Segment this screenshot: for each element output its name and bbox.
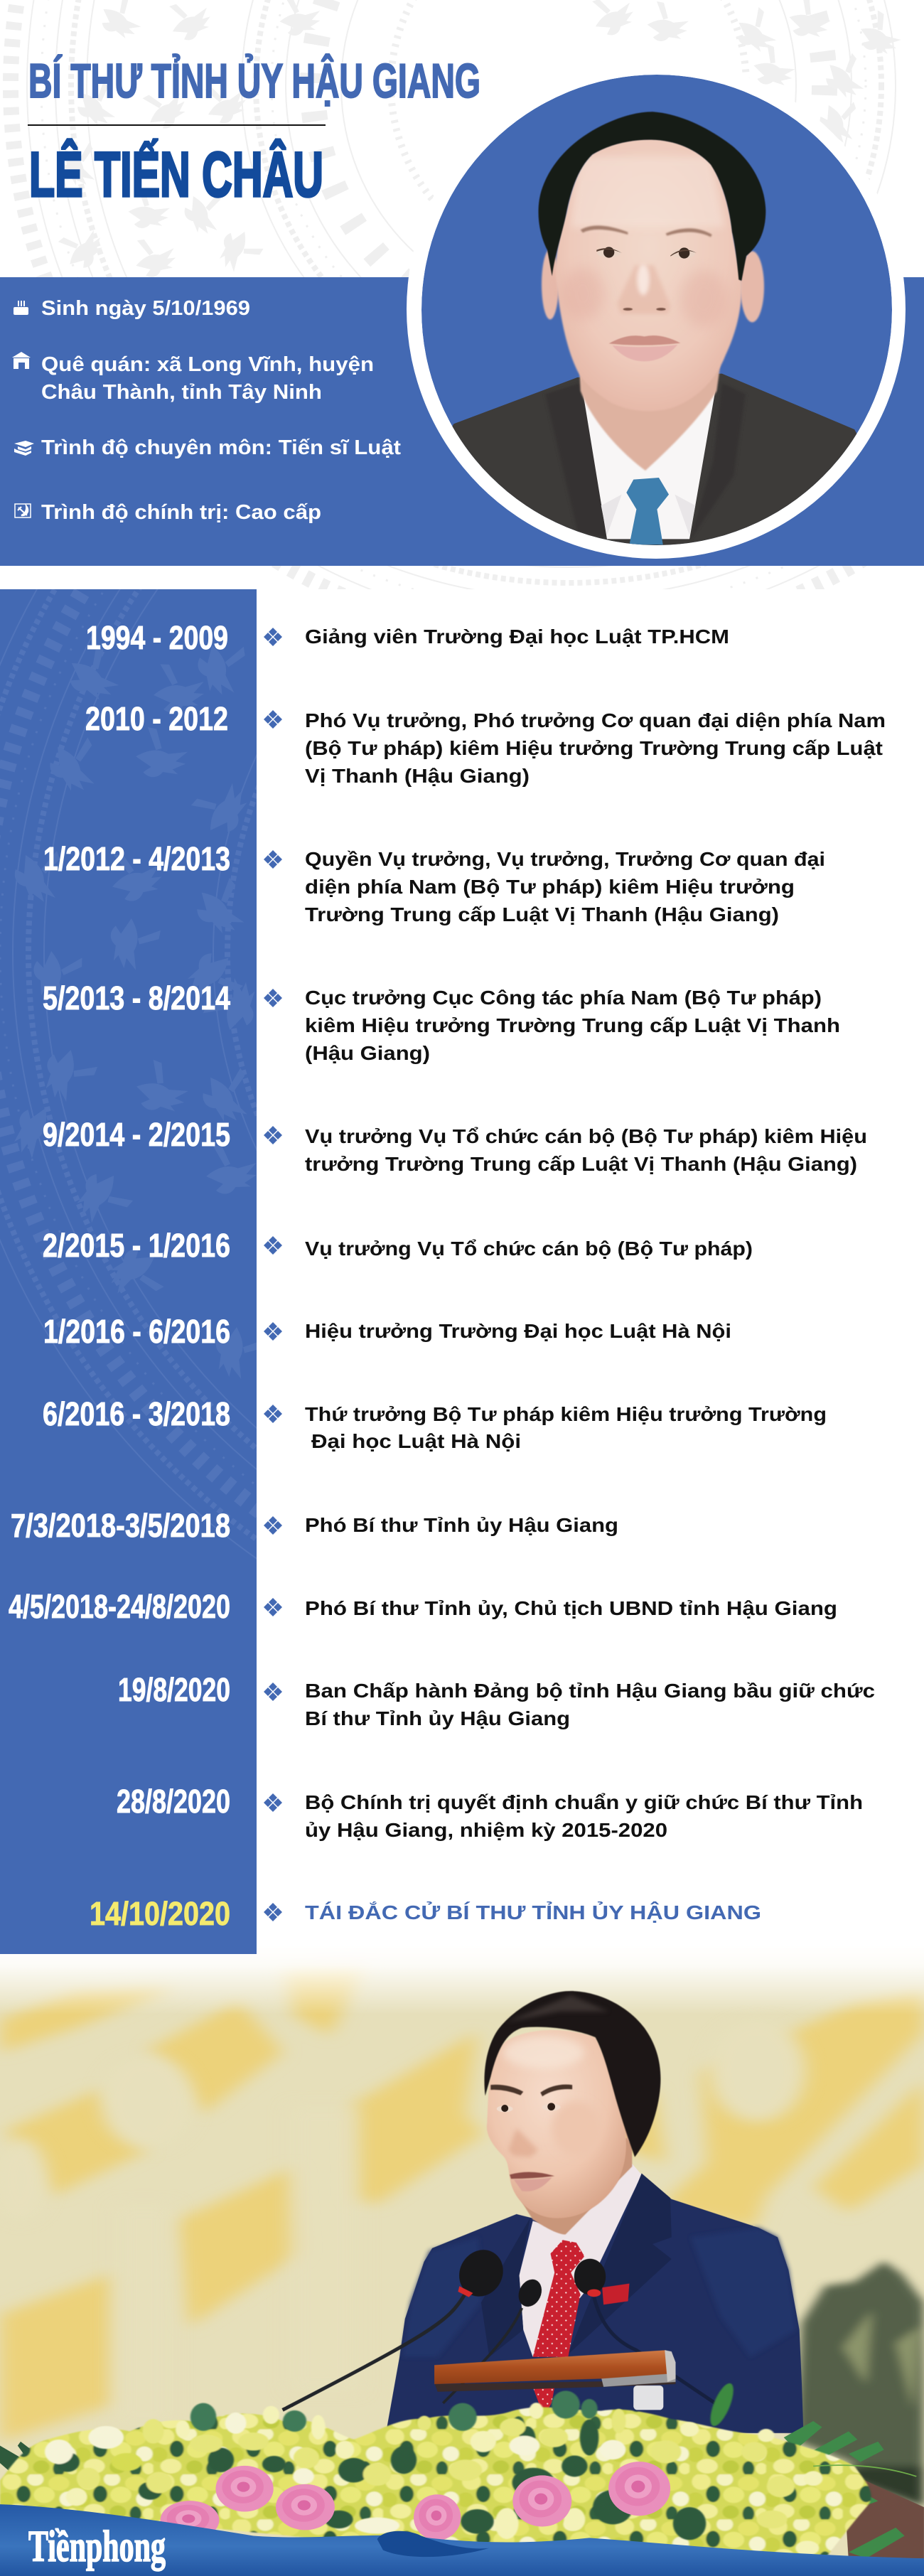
icon: house bbox=[12, 352, 31, 369]
timeline row 6 bbox=[43, 1227, 753, 1264]
bullet bbox=[264, 628, 282, 646]
description: Phó Bí thư Tỉnh ủy Hậu Giang bbox=[305, 1514, 618, 1536]
date: 2010 - 2012 bbox=[85, 700, 228, 737]
date: 1994 - 2009 bbox=[86, 619, 228, 656]
ear bbox=[625, 2128, 630, 2142]
description: Vụ trưởng Vụ Tổ chức cán bộ (Bộ Tư pháp) bbox=[305, 1238, 753, 1260]
leaves bbox=[0, 2442, 47, 2479]
suit bbox=[386, 2173, 803, 2433]
date: 2/2015 - 1/2016 bbox=[43, 1227, 230, 1264]
timeline row 3 bbox=[43, 840, 825, 925]
nose bbox=[508, 2128, 538, 2157]
description: Bí thư Tỉnh ủy Hậu Giang bbox=[305, 1707, 570, 1729]
portrait: photo in blue circle bbox=[421, 75, 892, 545]
description: Vị Thanh (Hậu Giang) bbox=[305, 765, 530, 787]
white fade at top of photo bbox=[0, 1944, 924, 2015]
date: 5/2013 - 8/2014 bbox=[43, 980, 230, 1016]
bullet bbox=[264, 850, 282, 869]
description bbox=[305, 709, 886, 787]
timeline row 12 bbox=[117, 1783, 863, 1841]
description bbox=[305, 1125, 867, 1175]
timeline row 2 bbox=[85, 700, 886, 787]
name heading: LÊ TIẾN CHÂU bbox=[29, 139, 323, 210]
description bbox=[305, 987, 840, 1064]
eyes bbox=[497, 2105, 513, 2112]
icon: hammer and sickle bbox=[15, 504, 31, 517]
bullet bbox=[264, 1516, 282, 1535]
date: 28/8/2020 bbox=[117, 1783, 230, 1820]
flower leaves dark bbox=[190, 2403, 216, 2431]
face bbox=[556, 139, 741, 411]
info: professional level bbox=[14, 436, 401, 459]
lapels bbox=[481, 2173, 672, 2357]
description: diện phía Nam (Bộ Tư pháp) kiêm Hiệu trưởng bbox=[305, 876, 795, 898]
description: Bộ Chính trị quyết định chuẩn y giữ chức Bí thư Tỉnh bbox=[305, 1791, 863, 1813]
description: Thứ trưởng Bộ Tư pháp kiêm Hiệu trưởng Trường bbox=[305, 1403, 827, 1425]
bullet bbox=[264, 1236, 282, 1255]
description: Trường Trung cấp Luật Vị Thanh (Hậu Giang) bbox=[305, 903, 779, 925]
timeline row 13: highlight bbox=[90, 1895, 761, 1932]
blurred plant right bbox=[795, 2261, 924, 2507]
divider rule bbox=[28, 124, 326, 126]
timeline row 1 bbox=[86, 619, 729, 656]
timeline row 10 bbox=[9, 1588, 837, 1625]
info: birth date bbox=[14, 297, 250, 320]
neck bbox=[517, 2137, 632, 2235]
description: Hiệu trưởng Trường Đại học Luật Hà Nội bbox=[305, 1320, 731, 1342]
bullet bbox=[264, 1322, 282, 1341]
date: 9/2014 - 2/2015 bbox=[43, 1116, 230, 1153]
bullet bbox=[264, 1598, 282, 1616]
description: trưởng Trường Trung cấp Luật Vị Thanh (Hậu Giang) bbox=[305, 1153, 857, 1175]
podium side bbox=[847, 2480, 924, 2559]
date: 19/8/2020 bbox=[118, 1671, 230, 1708]
description bbox=[305, 1680, 875, 1729]
text: home town line 1: Quê quán: xã Long Vĩnh, huyện bbox=[41, 353, 374, 376]
man in navy suit bbox=[283, 1991, 803, 2433]
microphone left bbox=[283, 2242, 512, 2410]
shirt bbox=[519, 2164, 642, 2357]
date: 4/5/2018-24/8/2020 bbox=[9, 1588, 230, 1625]
mouth bbox=[510, 2172, 554, 2179]
description: ủy Hậu Giang, nhiệm kỳ 2015-2020 bbox=[305, 1819, 667, 1841]
bullet bbox=[264, 1903, 282, 1921]
bullet bbox=[264, 1405, 282, 1423]
description bbox=[305, 848, 825, 925]
date: 7/3/2018-3/5/2018 bbox=[11, 1507, 230, 1544]
lectern bar bbox=[434, 2350, 676, 2410]
description: Đại học Luật Hà Nội bbox=[311, 1430, 521, 1452]
photo background wall bbox=[0, 1942, 924, 2572]
timeline row 4 bbox=[43, 980, 840, 1064]
background: bronze drum pattern bbox=[3, 0, 900, 589]
tie bbox=[533, 2240, 584, 2417]
timeline row 8 bbox=[43, 1395, 827, 1452]
description: Phó Bí thư Tỉnh ủy, Chủ tịch UBND tỉnh Hậu Giang bbox=[305, 1597, 837, 1619]
brows bbox=[581, 225, 712, 237]
timeline row 7 bbox=[43, 1313, 731, 1350]
microphone centre bbox=[443, 2275, 546, 2403]
flower bed bbox=[0, 2407, 871, 2558]
hair bbox=[539, 112, 765, 281]
badge bbox=[602, 2283, 629, 2304]
date: 6/2016 - 3/2018 bbox=[43, 1395, 230, 1432]
bullet bbox=[264, 1126, 282, 1144]
date: 1/2016 - 6/2016 bbox=[43, 1313, 230, 1350]
text: home town line 2: Châu Thành, tỉnh Tây Ninh bbox=[41, 381, 322, 404]
description: Vụ trưởng Vụ Tổ chức cán bộ (Bộ Tư pháp) kiêm Hiệu bbox=[305, 1125, 867, 1147]
nose bbox=[617, 265, 670, 314]
icon: birthday cake bbox=[14, 301, 28, 315]
flower arrangement bbox=[0, 2382, 916, 2558]
description: (Bộ Tư pháp) kiêm Hiệu trưởng Trường Trung cấp Luật bbox=[305, 737, 883, 759]
description: Quyền Vụ trưởng, Vụ trưởng, Trưởng Cơ quan đại bbox=[305, 848, 825, 870]
date: 14/10/2020 bbox=[90, 1895, 230, 1932]
timeline row 9 bbox=[11, 1507, 618, 1544]
bullet bbox=[264, 1683, 282, 1701]
neck bbox=[579, 365, 720, 471]
bullet bbox=[264, 710, 282, 729]
bullet bbox=[264, 989, 282, 1007]
eyes bbox=[597, 248, 621, 257]
hair bbox=[484, 1991, 660, 2157]
description: Ban Chấp hành Đảng bộ tỉnh Hậu Giang bầu giữ chức bbox=[305, 1680, 875, 1702]
description bbox=[305, 1403, 827, 1452]
text: professional level: Trình độ chuyên môn: Tiến sĩ Luật bbox=[41, 436, 401, 459]
orchid blossoms bbox=[263, 2406, 279, 2424]
portrait: white ring bbox=[407, 60, 906, 559]
icon: graduation cap and books bbox=[14, 441, 34, 456]
panel: personal info band bbox=[0, 277, 924, 566]
footer wave bbox=[0, 2504, 924, 2576]
brows bbox=[490, 2085, 572, 2096]
description: (Hậu Giang) bbox=[305, 1042, 430, 1064]
mouth bbox=[609, 336, 680, 345]
panel: timeline dates background bbox=[0, 212, 924, 1954]
face bbox=[487, 2030, 626, 2218]
logo: Tien Phong: Tiềnphong bbox=[28, 2523, 166, 2571]
microphone right bbox=[574, 2259, 724, 2408]
roses bbox=[215, 2466, 274, 2511]
info: political level bbox=[15, 501, 321, 524]
title: BÍ THƯ TỈNH ỦY HẬU GIANG bbox=[28, 53, 480, 108]
description: Giảng viên Trường Đại học Luật TP.HCM bbox=[305, 626, 729, 648]
description: TÁI ĐẮC CỬ BÍ THƯ TỈNH ỦY HẬU GIANG bbox=[305, 1901, 761, 1923]
description: kiêm Hiệu trưởng Trường Trung cấp Luật Vị Thanh bbox=[305, 1014, 840, 1036]
text: birth date: Sinh ngày 5/10/1969 bbox=[41, 297, 250, 320]
date: 1/2012 - 4/2013 bbox=[43, 840, 230, 877]
info: home town bbox=[12, 352, 374, 404]
description: Phó Vụ trưởng, Phó trưởng Cơ quan đại diện phía Nam bbox=[305, 709, 886, 731]
description bbox=[305, 1791, 863, 1841]
photo: speaker at podium bbox=[0, 1942, 924, 2576]
timeline row 11 bbox=[118, 1671, 875, 1729]
text: political level: Trình độ chính trị: Cao cấp bbox=[41, 501, 321, 524]
bullet bbox=[264, 1793, 282, 1812]
timeline row 5 bbox=[43, 1116, 867, 1175]
description: Cục trưởng Cục Công tác phía Nam (Bộ Tư pháp) bbox=[305, 987, 822, 1009]
